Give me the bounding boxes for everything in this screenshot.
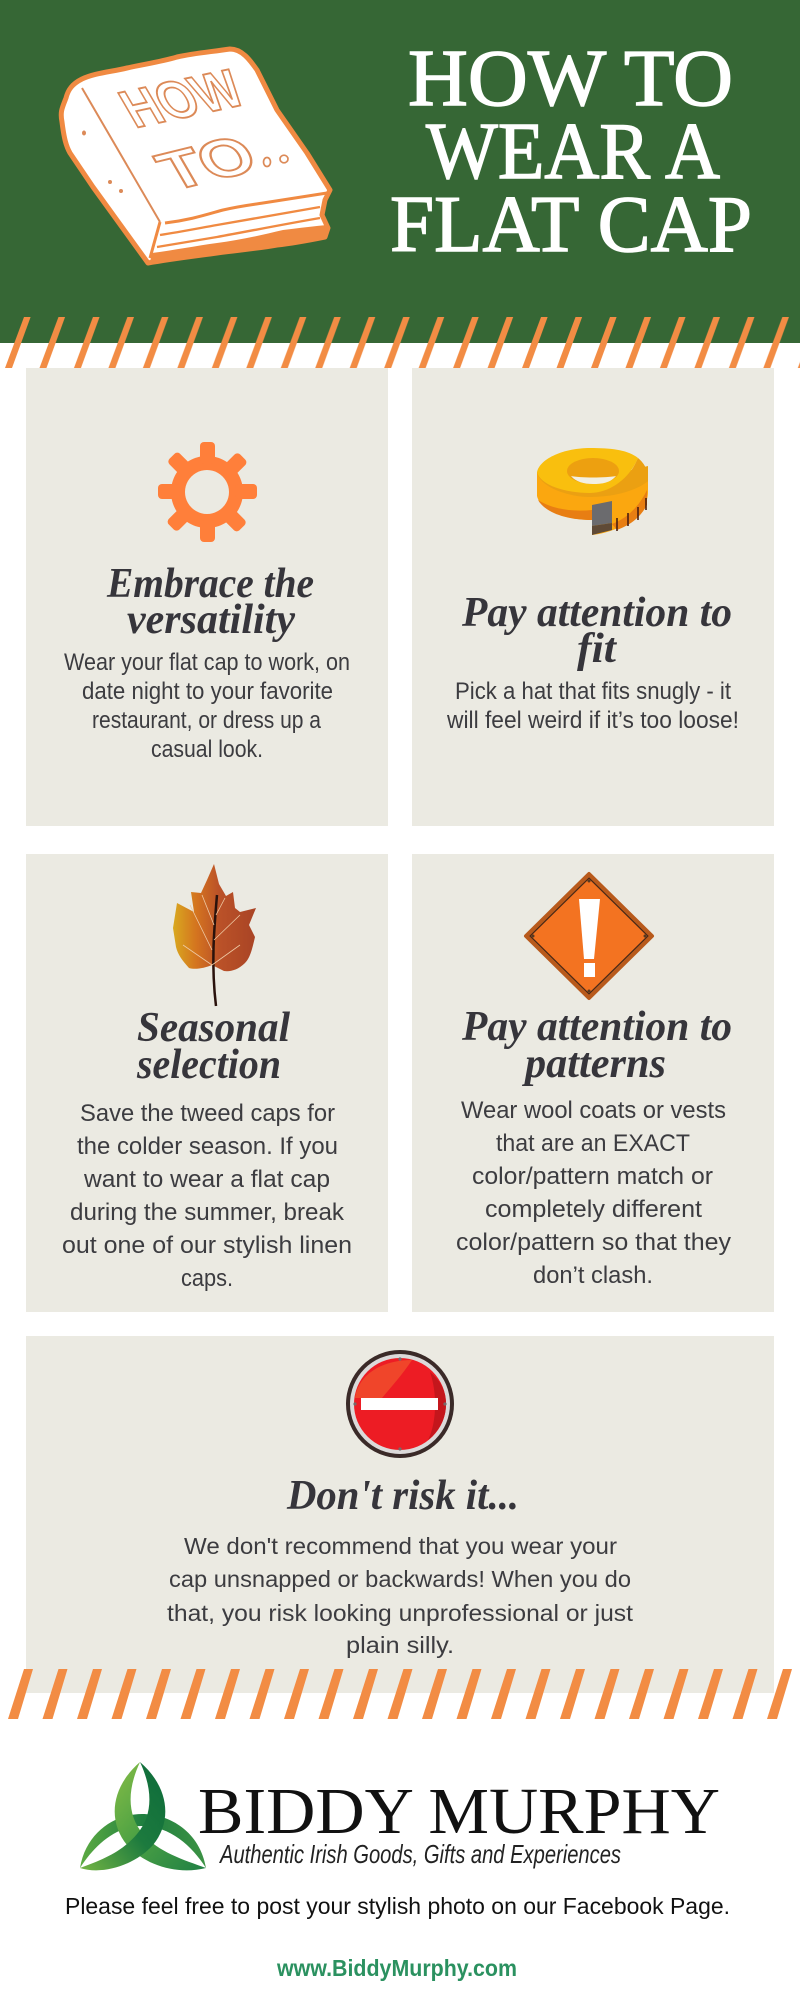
body text: plain silly. <box>346 1632 454 1658</box>
panel: fit <box>412 368 774 826</box>
body text <box>446 678 739 734</box>
bottom stripes <box>0 1669 800 1719</box>
title: WEAR A <box>426 108 720 196</box>
body text: restaurant, or dress up a <box>92 707 322 734</box>
body text: We don't recommend that you wear your <box>184 1533 617 1559</box>
panel: seasonal <box>26 854 388 1312</box>
heading <box>106 561 314 643</box>
website link: www.BiddyMurphy.com <box>276 1955 517 1981</box>
heading: versatility <box>127 597 295 643</box>
panel: don't risk it <box>26 1336 774 1693</box>
body text: want to wear a flat cap <box>83 1166 330 1193</box>
icon: how-to book <box>61 49 330 263</box>
body text: that, you risk looking unprofessional or just <box>167 1600 634 1626</box>
title: FLAT CAP <box>390 181 752 269</box>
icon: trinity knot <box>80 1762 206 1870</box>
body text: Save the tweed caps for <box>80 1100 335 1127</box>
body text <box>456 1097 731 1289</box>
body text: Wear wool coats or vests <box>461 1097 726 1124</box>
heading: selection <box>136 1042 281 1088</box>
icon: gear <box>158 442 257 542</box>
heading: Seasonal <box>137 1005 290 1051</box>
body text <box>62 1100 352 1292</box>
body text: will feel weird if it’s too loose! <box>446 707 739 734</box>
body text: date night to your favorite <box>82 678 333 705</box>
body text: color/pattern match or <box>472 1163 713 1190</box>
body text <box>64 649 350 763</box>
heading <box>136 1005 290 1088</box>
icon: warning sign <box>526 874 652 998</box>
heading: Pay attention to <box>461 590 732 636</box>
body text: casual look. <box>151 736 263 763</box>
footer note: Please feel free to post your stylish photo on our Facebook Page. <box>65 1893 730 1919</box>
title <box>390 35 752 269</box>
title: HOW TO <box>408 35 733 123</box>
body text: that are an EXACT <box>496 1130 690 1157</box>
body text <box>167 1533 634 1658</box>
tagline: Authentic Irish Goods, Gifts and Experiences <box>218 1839 621 1869</box>
panel: patterns <box>412 854 774 1312</box>
body text: out one of our stylish linen <box>62 1232 352 1259</box>
top stripes <box>0 317 800 368</box>
body text: completely different <box>485 1196 702 1223</box>
header band <box>0 0 800 343</box>
heading: Don't risk it... <box>286 1473 519 1519</box>
wordmark: BIDDY MURPHY <box>198 1775 720 1848</box>
body text: color/pattern so that they <box>456 1229 731 1256</box>
heading <box>461 1004 732 1087</box>
icon: how-to book: HOW <box>109 60 255 139</box>
icon: no-entry sign <box>346 1350 454 1458</box>
body text: Wear your flat cap to work, on <box>64 649 350 676</box>
panel: versatility <box>26 368 388 826</box>
body text: the colder season. If you <box>77 1133 338 1160</box>
logo: Biddy Murphy <box>80 1762 720 1870</box>
body text: caps. <box>181 1265 233 1292</box>
body text: cap unsnapped or backwards! When you do <box>169 1566 631 1592</box>
icon: how-to book: TO <box>146 125 268 202</box>
body text: don’t clash. <box>533 1262 653 1289</box>
heading <box>461 590 732 672</box>
icon: autumn leaf <box>173 864 256 1006</box>
body text: during the summer, break <box>70 1199 345 1226</box>
icon: measuring tape <box>537 448 648 535</box>
heading: Embrace the <box>106 561 314 607</box>
body text: Pick a hat that fits snugly - it <box>455 678 731 705</box>
heading: fit <box>577 626 617 672</box>
heading: patterns <box>522 1041 666 1087</box>
heading: Pay attention to <box>461 1004 732 1050</box>
